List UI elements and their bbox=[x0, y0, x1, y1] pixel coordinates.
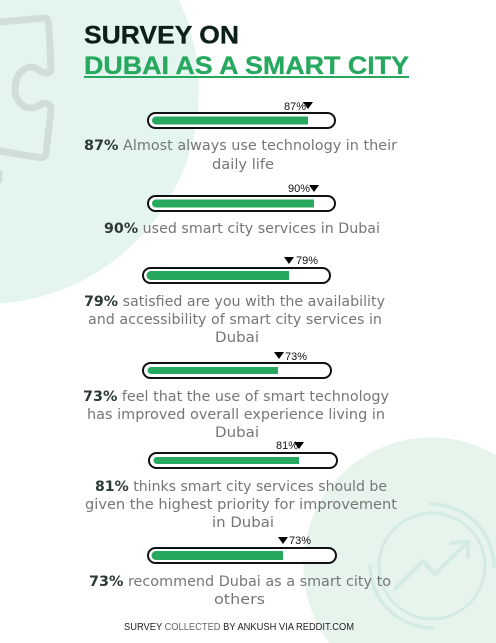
title underline bbox=[84, 76, 409, 78]
caption 87% bbox=[84, 138, 397, 173]
caption 87%: daily life bbox=[212, 157, 274, 173]
caption 73%: 73% feel that the use of smart technology bbox=[83, 389, 389, 405]
caption 73% recommend bbox=[89, 574, 391, 608]
bar 81% bbox=[149, 453, 337, 468]
icon: growth chart circle bbox=[370, 504, 494, 628]
progress item 1 bbox=[84, 101, 397, 173]
marker 73%: 73% bbox=[285, 351, 307, 363]
caption 81%: given the highest priority for improvement bbox=[85, 497, 398, 513]
marker 73% recommend: 73% bbox=[289, 535, 311, 547]
background circle: bottom right bbox=[303, 437, 496, 643]
bar 79% bbox=[143, 268, 330, 283]
caption 73% recommend: others bbox=[214, 592, 265, 608]
progress item 6 bbox=[89, 535, 391, 608]
progress item 3 bbox=[84, 255, 385, 346]
caption 79% bbox=[84, 294, 385, 346]
title line 2: DUBAI AS A SMART CITY bbox=[84, 52, 409, 80]
progress item 4 bbox=[83, 351, 389, 441]
caption 73%: has improved overall experience living in bbox=[87, 407, 385, 423]
marker 90%: 90% bbox=[288, 183, 310, 195]
caption 79%: 79% satisfied are you with the availability bbox=[84, 294, 385, 310]
caption 87%: 87% Almost always use technology in their bbox=[84, 138, 397, 154]
bar 73% recommend bbox=[148, 548, 336, 563]
caption 81%: 81% thinks smart city services should be bbox=[95, 479, 387, 495]
marker 73% bbox=[274, 351, 307, 363]
title bbox=[84, 22, 409, 80]
bar 87% bbox=[148, 113, 335, 128]
background circle: top left bbox=[0, 0, 199, 304]
icon: puzzle piece bbox=[0, 18, 51, 180]
caption 90%: 90% used smart city services in Dubai bbox=[104, 221, 380, 237]
caption 73% bbox=[83, 389, 389, 441]
caption 79%: and accessibility of smart city services in bbox=[88, 312, 382, 328]
progress item 5 bbox=[85, 440, 398, 531]
marker 79% bbox=[284, 255, 318, 267]
bar 90% bbox=[148, 196, 335, 211]
marker 79%: 79% bbox=[296, 255, 318, 267]
caption 73%: Dubai bbox=[215, 425, 259, 441]
progress item 2 bbox=[104, 183, 380, 237]
bar 73% bbox=[143, 363, 331, 378]
marker 87%: 87% bbox=[284, 101, 306, 113]
footer credit: SURVEY COLLECTED BY ANKUSH VIA REDDIT.COM bbox=[124, 622, 354, 633]
marker 81%: 81% bbox=[276, 440, 298, 452]
caption 79%: Dubai bbox=[215, 330, 259, 346]
marker 73% recommend bbox=[278, 535, 311, 547]
caption 81%: in Dubai bbox=[212, 515, 274, 531]
caption 73% recommend: 73% recommend Dubai as a smart city to bbox=[89, 574, 391, 590]
caption 81% bbox=[85, 479, 398, 531]
title line 1: SURVEY ON bbox=[84, 22, 239, 50]
